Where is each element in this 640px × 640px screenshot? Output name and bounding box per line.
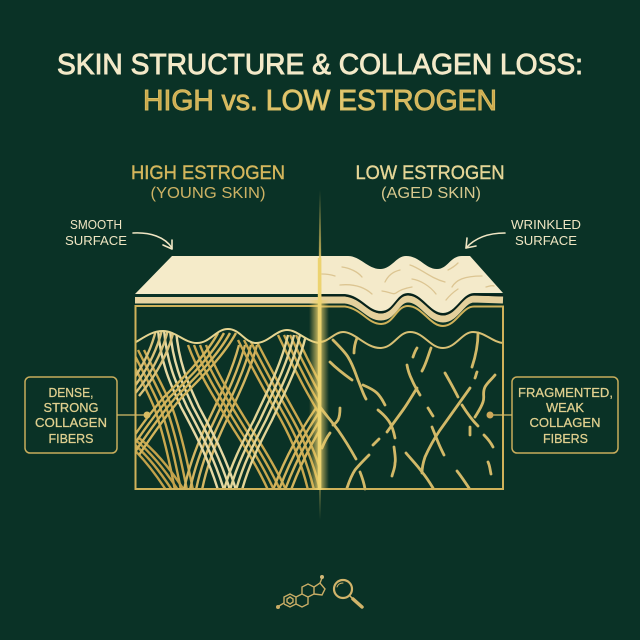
skin layer: tan left	[135, 297, 320, 304]
title: HIGH vs. LOW ESTROGEN	[143, 85, 497, 117]
skin layer: tan right	[320, 299, 503, 319]
heading: high estrogen: HIGH ESTROGEN	[131, 163, 285, 184]
label: smooth surface	[65, 218, 127, 248]
heading: high estrogen: (YOUNG SKIN)	[150, 185, 266, 202]
label: smooth surface: SMOOTH	[70, 218, 122, 232]
heading: low estrogen: LOW ESTROGEN	[356, 163, 504, 184]
callout: fragmented collagen fibers	[486, 377, 618, 453]
callout: fragmented collagen fibers: COLLAGEN	[530, 415, 600, 430]
callout: dense collagen fibers: DENSE,	[48, 385, 94, 400]
panel: skin cross-section	[121, 256, 503, 490]
frame	[136, 306, 503, 489]
skin surface: smooth	[135, 256, 320, 294]
heading: low estrogen	[356, 163, 504, 202]
heading: high estrogen	[131, 163, 285, 202]
callout: fragmented collagen fibers: FRAGMENTED,	[518, 385, 613, 400]
label: wrinkled surface: WRINKLED	[511, 218, 581, 232]
icon: magnifying glass	[334, 580, 362, 607]
arrow: smooth surface	[133, 233, 172, 249]
callout: dense collagen fibers: FIBERS	[48, 431, 94, 446]
dermis top wave: right	[320, 332, 503, 348]
icon: estrogen molecule	[276, 575, 325, 609]
dark separator: right	[320, 294, 503, 314]
callout: dense collagen fibers: STRONG	[44, 400, 98, 415]
label: smooth surface: SURFACE	[65, 234, 127, 248]
callout: dense collagen fibers: COLLAGEN	[35, 415, 107, 430]
callout: fragmented collagen fibers: FIBERS	[543, 431, 588, 446]
center divider beam	[309, 190, 329, 520]
callout: dense collagen fibers	[25, 377, 150, 453]
heading: low estrogen: (AGED SKIN)	[381, 185, 481, 202]
skin surface: wrinkled	[320, 256, 503, 313]
callout: fragmented collagen fibers: WEAK	[546, 400, 584, 415]
arrow: wrinkled surface	[466, 233, 505, 248]
label: wrinkled surface: SURFACE	[515, 234, 577, 248]
dermis top wave: left	[136, 329, 320, 343]
wrinkle lines	[322, 263, 494, 300]
collagen fibers: dense	[136, 332, 318, 488]
label: wrinkled surface	[511, 218, 581, 248]
title: SKIN STRUCTURE & COLLAGEN LOSS:	[57, 49, 583, 81]
collagen fibers: fragmented	[320, 333, 495, 489]
title	[57, 49, 583, 117]
